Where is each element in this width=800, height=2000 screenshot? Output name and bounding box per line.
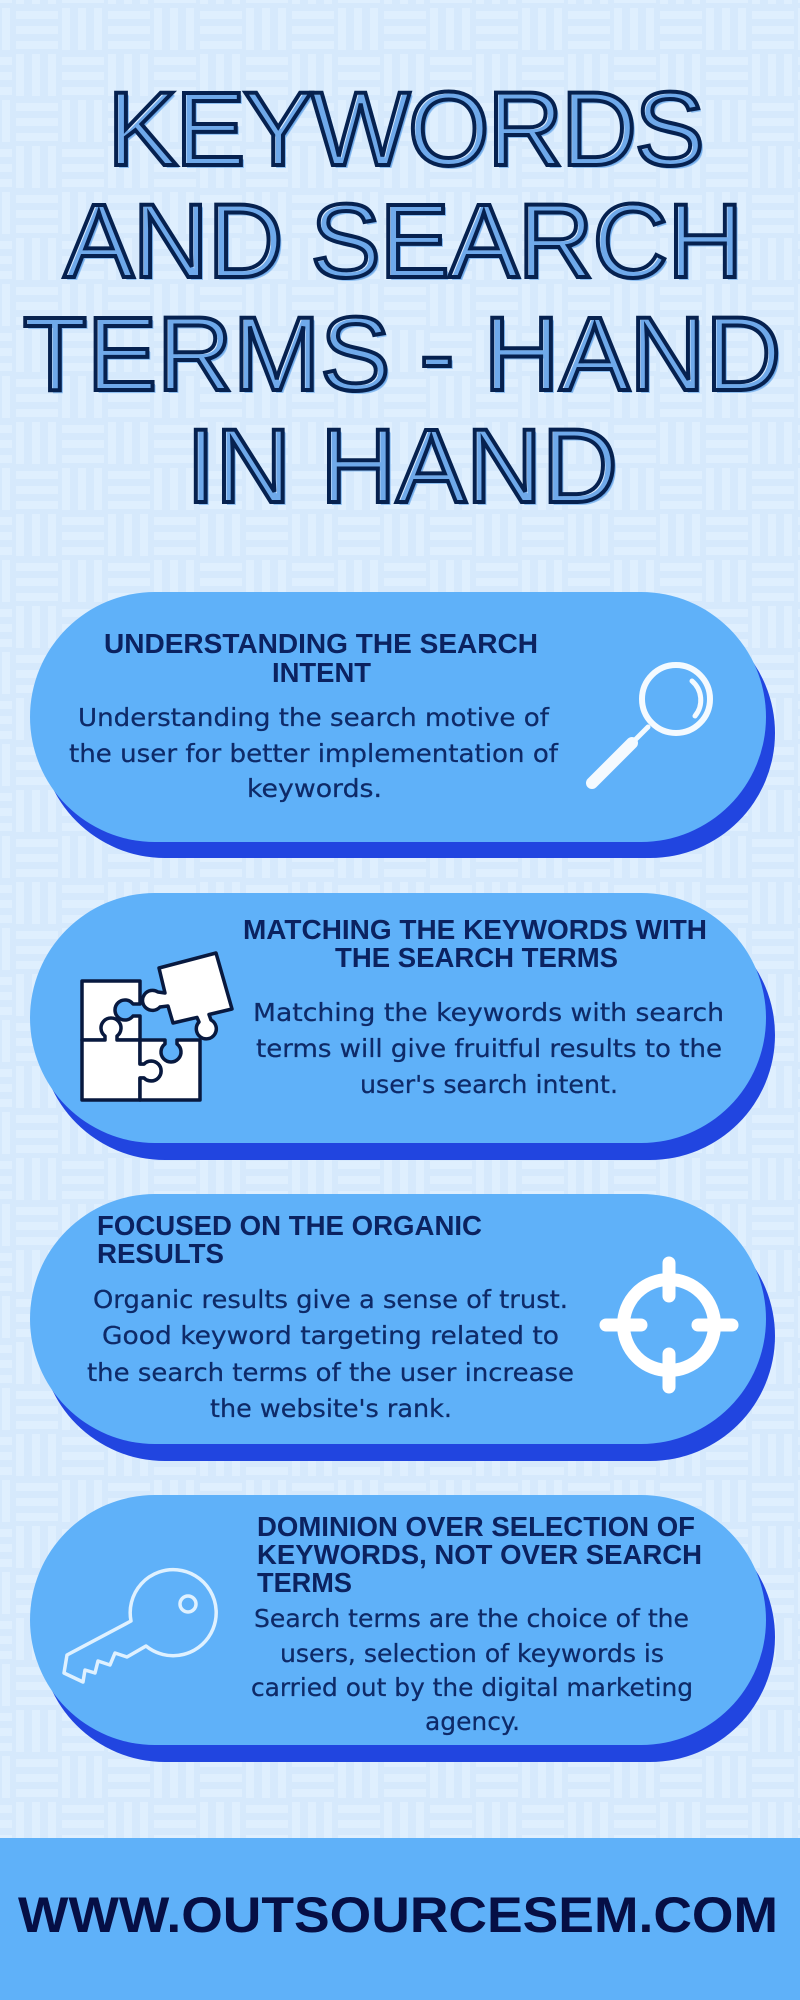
text: organic body: the search terms of the user increase xyxy=(87,1358,574,1387)
heading: matching the keywords: MATCHING THE KEYWORDS WITH xyxy=(243,914,707,945)
text: understanding body: Understanding the search motive of xyxy=(78,703,550,732)
heading: understanding the search intent: INTENT xyxy=(272,657,371,688)
text: matching body: user's search intent. xyxy=(360,1070,618,1099)
title: IN HAND xyxy=(186,408,618,525)
heading: dominion over selection: KEYWORDS, NOT OVER SEARCH xyxy=(257,1539,702,1570)
heading: understanding the search intent xyxy=(104,628,538,688)
panel: focused on the organic results xyxy=(30,1194,775,1461)
text: organic body xyxy=(87,1285,574,1423)
heading: focused on organic results: FOCUSED ON THE ORGANIC xyxy=(97,1210,482,1241)
heading: matching the keywords: THE SEARCH TERMS xyxy=(335,942,618,973)
title xyxy=(23,71,781,525)
icon: target crosshair xyxy=(606,1263,732,1387)
text: understanding body xyxy=(69,703,559,803)
title: AND SEARCH xyxy=(64,183,742,300)
text: organic body: Good keyword targeting related to xyxy=(102,1321,559,1350)
icon: puzzle pieces xyxy=(82,953,232,1100)
text: dominion body: Search terms are the choice of the xyxy=(254,1604,689,1633)
text: dominion body: agency. xyxy=(425,1707,520,1736)
heading: dominion over selection: DOMINION OVER SELECTION OF xyxy=(257,1511,695,1542)
icon: magnifying glass xyxy=(592,665,710,783)
footer url: WWW.OUTSOURCESEM.COM xyxy=(18,1887,778,1943)
heading: matching the keywords xyxy=(243,914,707,973)
heading: focused on organic results: RESULTS xyxy=(97,1238,224,1269)
text: dominion body: users, selection of keywords is xyxy=(280,1639,664,1668)
text: organic body: the website's rank. xyxy=(210,1394,452,1423)
text: understanding body: the user for better implementation of xyxy=(69,739,559,768)
heading: focused on organic results xyxy=(97,1210,482,1269)
text: matching body: Matching the keywords with search xyxy=(253,998,724,1027)
text: matching body xyxy=(253,998,724,1099)
heading: dominion over selection xyxy=(257,1511,702,1598)
panel: understanding the search intent xyxy=(30,592,775,858)
heading: understanding the search intent: UNDERSTANDING THE SEARCH xyxy=(104,628,538,659)
text: organic body: Organic results give a sense of trust. xyxy=(93,1285,568,1314)
text: dominion body xyxy=(251,1604,693,1736)
icon: key xyxy=(64,1570,216,1682)
text: matching body: terms will give fruitful results to the xyxy=(256,1034,722,1063)
footer band xyxy=(0,1838,800,2000)
title: TERMS - HAND xyxy=(23,296,781,413)
title: KEYWORDS xyxy=(108,71,702,188)
panel: dominion over selection of keywords xyxy=(30,1495,775,1762)
heading: dominion over selection: TERMS xyxy=(257,1567,352,1598)
text: dominion body: carried out by the digital marketing xyxy=(251,1673,693,1702)
text: understanding body: keywords. xyxy=(247,774,382,803)
panel: matching the keywords xyxy=(30,893,775,1160)
